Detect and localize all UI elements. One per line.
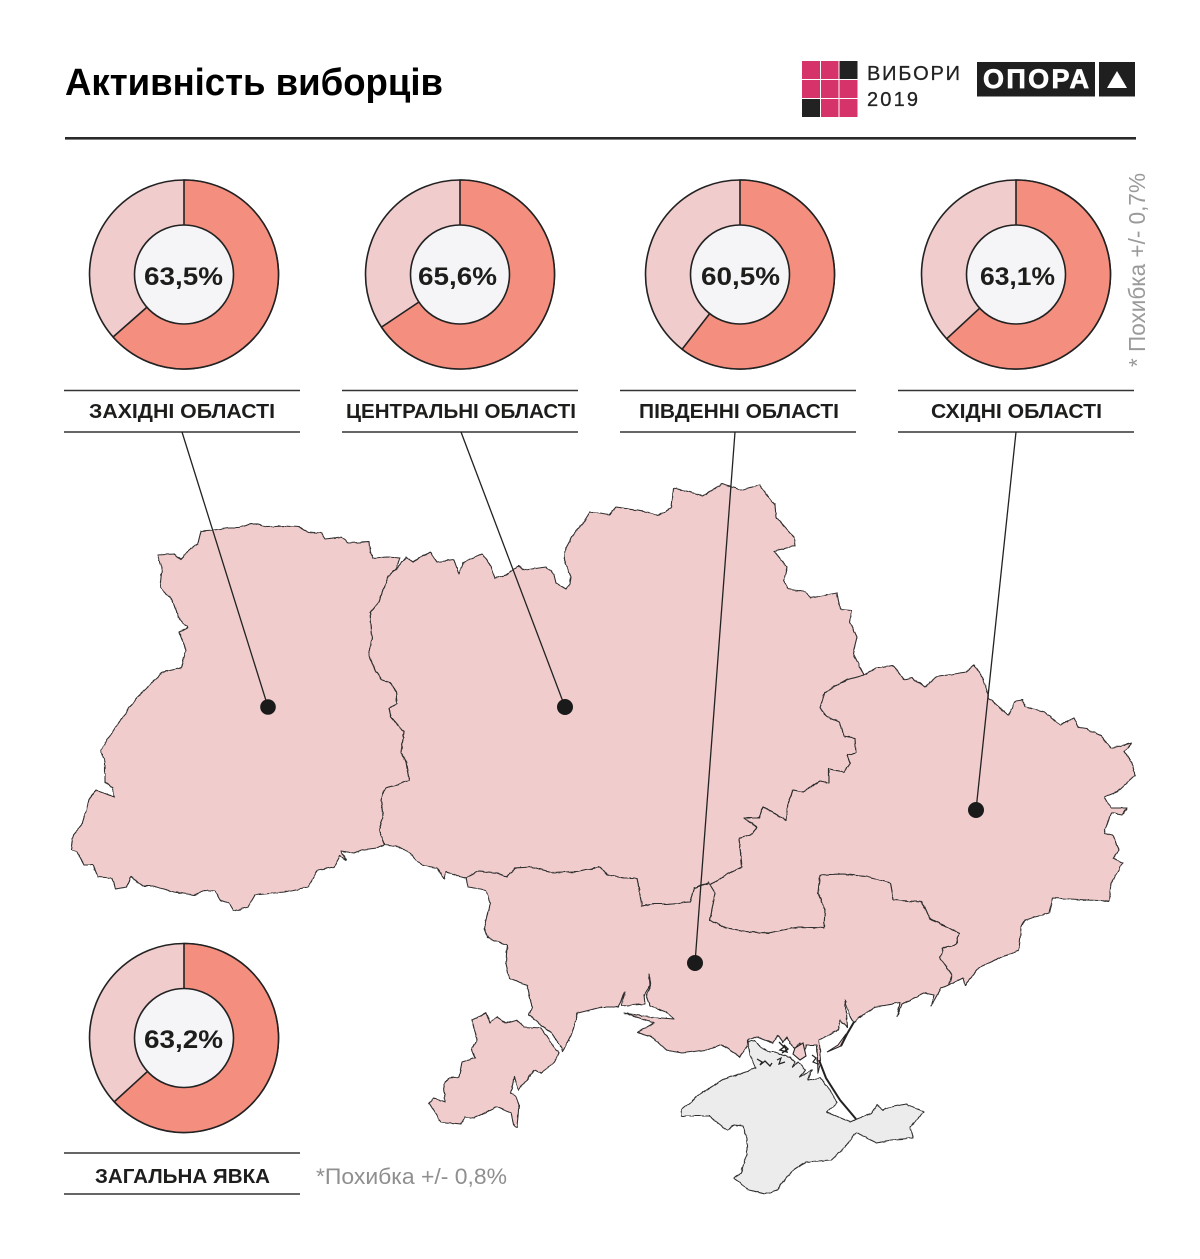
donut: східні області — [922, 180, 1110, 369]
region: southern, Budjak — [429, 1013, 559, 1127]
donut: східні області: 63,1% — [980, 263, 1055, 291]
leader: західні області — [182, 432, 276, 715]
map of Ukraine — [71, 484, 1135, 1194]
Arabat and Fedotova spits, Sivash shoals — [757, 1022, 856, 1119]
donut: центральні області: 65,6% — [418, 263, 497, 291]
donut: західні області: 63,5% — [144, 263, 223, 291]
logo: Опора — [977, 62, 1135, 96]
region: eastern — [710, 665, 1135, 985]
logo: Вибори 2019: ВИБОРИ — [867, 63, 960, 85]
donut: західні області — [90, 180, 278, 369]
margin of error note: regions: * Похибка +/- 0,7% — [1124, 173, 1150, 367]
donut: загальна явка: 63,2% — [144, 1026, 223, 1054]
region: Crimea — [681, 1040, 924, 1194]
donut: південні області — [646, 180, 834, 369]
region: southern — [466, 867, 959, 1073]
leader: центральні області — [461, 432, 573, 715]
leader: південні області — [687, 432, 735, 971]
region: western — [71, 523, 409, 911]
label: загальна явка: ЗАГАЛЬНА ЯВКА — [95, 1165, 270, 1188]
logo: Вибори 2019: 2019 — [867, 89, 918, 111]
label: східні області: СХІДНІ ОБЛАСТІ — [931, 400, 1102, 423]
label: центральні області: ЦЕНТРАЛЬНІ ОБЛАСТІ — [346, 400, 576, 423]
logo: Опора: ОПОРА — [983, 64, 1089, 94]
region: central — [369, 484, 864, 906]
title: Активність виборців — [65, 62, 443, 104]
leader: східні області — [968, 432, 1016, 818]
margin of error note: total: *Похибка +/- 0,8% — [316, 1164, 507, 1189]
label: південні області: ПІВДЕННІ ОБЛАСТІ — [639, 400, 839, 423]
label: західні області: ЗАХІДНІ ОБЛАСТІ — [89, 400, 275, 423]
donut: загальна явка — [90, 944, 279, 1132]
donut: південні області: 60,5% — [701, 263, 780, 291]
donut: центральні області — [366, 180, 555, 369]
logo: Вибори 2019 — [802, 61, 960, 117]
